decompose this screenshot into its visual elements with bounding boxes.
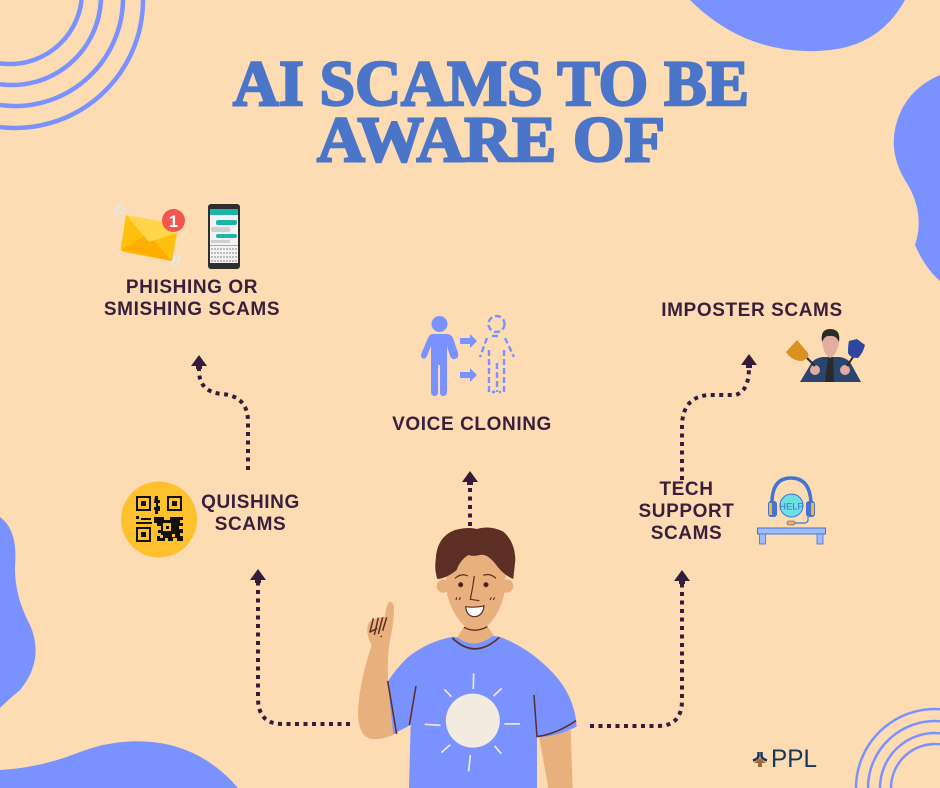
title: AI SCAMS TO BE bbox=[233, 48, 749, 120]
eyes, brows, nose, cheeks bbox=[455, 574, 496, 601]
decoration: left blob bbox=[0, 517, 36, 708]
icon: help headset on desk bbox=[758, 478, 826, 544]
icon: smartphone with chat bbox=[208, 204, 240, 269]
illustration: man pointing up bbox=[358, 527, 577, 788]
ears bbox=[437, 579, 450, 593]
icon: envelope with notification bbox=[115, 204, 185, 268]
decoration: bottom-left blob bbox=[0, 741, 238, 788]
label: tech support scams: TECH bbox=[659, 479, 714, 500]
collar bbox=[452, 637, 499, 649]
logo: PPL: PPL bbox=[771, 745, 817, 773]
label: voice cloning: VOICE CLONING bbox=[392, 414, 552, 435]
arrow: quishing to phishing bbox=[191, 355, 248, 470]
sleeve lines bbox=[388, 681, 576, 737]
title bbox=[233, 48, 749, 176]
label: phishing or smishing scams: SMISHING SCAMS bbox=[104, 299, 280, 320]
label: imposter scams: IMPOSTER SCAMS bbox=[661, 300, 843, 321]
label: tech support scams bbox=[638, 479, 735, 544]
arrow: to tech support scams bbox=[590, 570, 690, 726]
face bbox=[446, 550, 506, 630]
t-shirt bbox=[388, 636, 577, 788]
icon: voice cloning figures bbox=[421, 316, 514, 396]
label: phishing or smishing scams: PHISHING OR bbox=[126, 277, 258, 298]
decoration: top-left concentric rings bbox=[0, 0, 143, 128]
label: tech support scams: SUPPORT bbox=[638, 501, 735, 522]
chin line bbox=[464, 627, 487, 630]
right arm bbox=[539, 730, 573, 788]
label: phishing or smishing scams bbox=[104, 277, 280, 320]
icon: QR code in yellow circle bbox=[121, 482, 197, 558]
decoration: top-right blob bbox=[690, 0, 905, 51]
title: AWARE OF bbox=[317, 104, 665, 176]
neck bbox=[457, 625, 494, 643]
icon: help headset on desk: HELP bbox=[779, 502, 804, 512]
raised left arm and hand bbox=[358, 602, 397, 739]
label: quishing scams bbox=[201, 492, 300, 535]
icon: envelope with notification: 1 bbox=[169, 212, 178, 231]
decoration: bottom-right concentric rings bbox=[856, 709, 940, 788]
arrow: tech support to imposter bbox=[682, 354, 757, 480]
label: quishing scams: SCAMS bbox=[215, 514, 286, 535]
label: quishing scams: QUISHING bbox=[201, 492, 300, 513]
arrow: to voice cloning bbox=[462, 471, 478, 526]
arrow: to quishing scams bbox=[250, 569, 350, 724]
decoration: right blob bbox=[894, 75, 940, 281]
mouth bbox=[466, 606, 484, 617]
hair bbox=[435, 527, 515, 579]
icon: imposter with masks bbox=[786, 329, 865, 382]
finger lines bbox=[369, 617, 387, 637]
sun print bbox=[446, 694, 500, 748]
label: tech support scams: SCAMS bbox=[651, 523, 722, 544]
